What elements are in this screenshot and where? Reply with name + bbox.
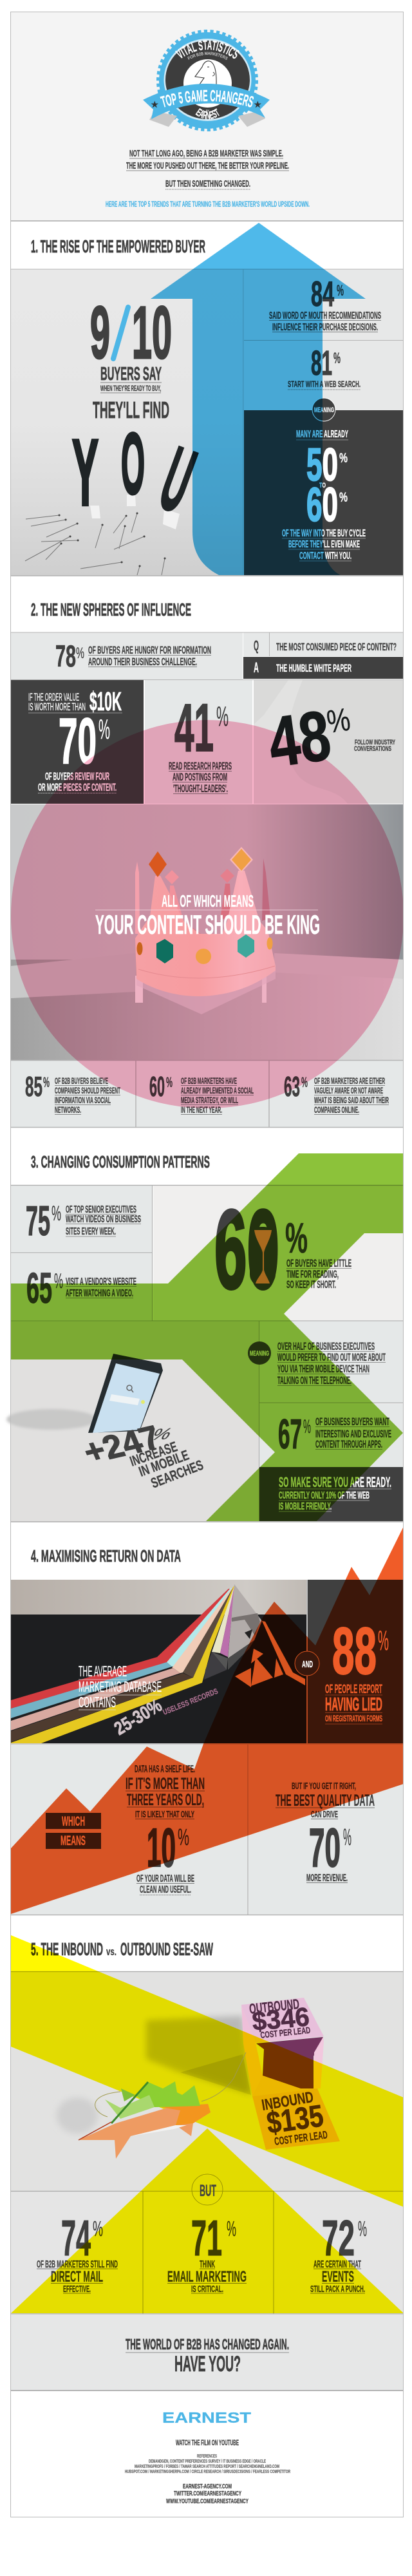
text: business executives	[277, 1341, 386, 1387]
illustration: colour stripes and pyramid	[11, 1584, 262, 1743]
heading: your content should be king	[95, 891, 320, 940]
stat: 84%	[269, 274, 381, 333]
panel: section 1	[11, 269, 404, 575]
stat: 9/10 buyers	[90, 292, 172, 423]
stat: 88%: 88	[332, 1614, 377, 1688]
icon: badge: TOP 5 GAME CHANGERS	[160, 90, 254, 107]
stat: 70%: IF THE ORDER VALUE	[28, 692, 79, 703]
illustration: origami dinosaur	[79, 2052, 246, 2159]
text: average marketing database: THE AVERAGE	[79, 1663, 127, 1680]
callout: answer	[254, 659, 351, 676]
stat: 9/10 buyers: WHEN THEY'RE READY TO BUY,	[100, 385, 161, 393]
stat: 70% more revenue: 70	[309, 1817, 341, 1878]
stat: 63%: COMPANIES ONLINE.	[314, 1104, 359, 1115]
panel: section 4 photo: %	[378, 1625, 389, 1656]
stat: 78%	[55, 639, 211, 673]
stat: +247% mobile searches: +247	[78, 1419, 167, 1471]
stat: 74% direct mail: DIRECT MAIL	[51, 2268, 103, 2286]
stat: 41%: %	[216, 701, 229, 732]
text: references	[125, 2454, 290, 2474]
callout: which means: MEANS	[61, 1833, 86, 1848]
stat: 50 to 60%: MANY ARE ALREADY	[296, 429, 348, 440]
icon: badge: ★	[254, 99, 262, 109]
stat: 75%: %	[52, 1202, 61, 1225]
overlay: yellow see-saw	[11, 1935, 404, 2313]
stat: 78%: %	[76, 645, 84, 662]
stat: +247% mobile searches: %	[148, 1425, 176, 1444]
text: intro copy	[126, 149, 289, 189]
illustration: inbound and outbound box: $135	[265, 2099, 326, 2141]
panel: section 2 bottom statistics	[11, 1060, 404, 1127]
illustration: inbound and outbound box	[241, 1996, 340, 2150]
stat: 63%	[284, 1071, 389, 1115]
stat: 9/10 buyers: BUYERS SAY	[100, 364, 162, 384]
stat: 41%: AND POSTINGS FROM	[173, 772, 227, 783]
text: links	[166, 2483, 248, 2505]
illustration: YOU letters and pins	[25, 416, 207, 575]
stat: 71% email marketing	[167, 2210, 247, 2295]
overlay: green chevrons	[11, 1153, 404, 1521]
stat: 60% with hourglass: SO KEEP IT SHORT.	[286, 1279, 336, 1291]
stat: 84%: %	[337, 282, 344, 299]
callout: answer: A	[254, 659, 259, 676]
stat: 50 to 60%: %	[339, 490, 348, 505]
stat: 60%: 60	[149, 1071, 165, 1103]
panel: section 3 statistics	[6, 1185, 404, 1521]
stat: 10%	[126, 1764, 205, 1895]
illustration: orange pyramid facets	[235, 1621, 305, 1687]
badge: but	[192, 2174, 223, 2205]
stat: 81%	[288, 344, 360, 390]
stat: 41%: 'THOUGHT-LEADERS'.	[173, 783, 228, 795]
stat: 10%: CLEAN AND USEFUL.	[140, 1884, 191, 1895]
stat: 75%	[26, 1197, 141, 1244]
overlay: orange zigzag	[11, 1526, 404, 1914]
illustration: inbound and outbound box: COST PER LEAD	[260, 2025, 311, 2040]
panel: section 4 lower statistics	[11, 1744, 404, 1915]
stat: 67%: 67	[278, 1410, 302, 1457]
panel: section 2 bottom statistics: COMPANIES SHOULD PRESENT	[55, 1085, 120, 1095]
stat: 70%: %	[98, 714, 110, 745]
stat: 60%: MEDIA STRATEGY, OR WILL	[181, 1095, 238, 1105]
stat: 70% more revenue: BUT IF YOU GET IT RIGHT,	[292, 1781, 356, 1792]
stat: 85%: 85	[25, 1071, 42, 1103]
stat: 85%: OF B2B BUYERS BELIEVE	[55, 1075, 108, 1086]
stat: 60% with hourglass: 60	[214, 1186, 279, 1312]
stat: 67%	[278, 1410, 391, 1457]
logo: Earnest: EARNEST	[162, 2409, 251, 2426]
icon: hourglass	[254, 1230, 272, 1283]
panel: section 4 lower statistics: THREE YEARS OLD,	[127, 1791, 204, 1809]
text: references: HUBSPOT.COM / MARKETINGSHERPA.COM / CIRCLE RESEARCH / SIRIUSDECISIONS / FEARLESS COMPETITOR	[125, 2470, 290, 2474]
heading: section 5: vs.	[106, 1946, 117, 1958]
stat: 10%: DATA HAS A SHELF LIFE.	[135, 1764, 195, 1775]
stat: 41%: 41	[174, 690, 214, 766]
icon: badge	[143, 30, 270, 131]
icon: badge: ★	[151, 99, 159, 109]
stat: 63%: 63	[284, 1071, 300, 1103]
text: average marketing database: CONTAINS	[79, 1694, 116, 1710]
text: references: REFERENCES	[197, 2454, 217, 2459]
text: OUTBOUND SEE-SAW	[120, 1939, 213, 1959]
illustration: paper crown	[135, 847, 276, 1014]
panel: section 5 photo	[11, 1972, 404, 2191]
icon: badge: BY	[206, 109, 210, 112]
stat: 50 to 60%: TO	[319, 482, 326, 489]
panel: section 5 statistics	[11, 1972, 404, 2314]
stat: 60%: OF B2B MARKETERS HAVE	[181, 1075, 237, 1086]
stat: 63%: %	[301, 1074, 308, 1090]
stat: 75%: WATCH VIDEOS ON BUSINESS	[66, 1214, 141, 1225]
stat: 10%: OF YOUR DATA WILL BE	[136, 1873, 194, 1884]
stat: 71% email marketing: %	[227, 2217, 236, 2240]
stat: 65%	[26, 1264, 136, 1312]
heading: section 3: 3. CHANGING CONSUMPTION PATTERNS	[31, 1152, 210, 1171]
stat: 50 to 60%	[282, 429, 366, 562]
stat: 72% events: ARE CERTAIN THAT	[314, 2259, 361, 2270]
stat: 60%: IN THE NEXT YEAR.	[181, 1104, 222, 1115]
stat: 48%: 48	[264, 696, 335, 782]
illustration: YOU letters and pins: U	[149, 428, 207, 531]
badge: and: AND	[302, 1659, 313, 1670]
panel: section 1: 10	[132, 292, 172, 374]
stat: 71% email marketing: 71	[191, 2210, 222, 2266]
stat: +247% mobile searches: SEARCHES	[149, 1457, 205, 1492]
stat: 72% events: EVENTS	[322, 2268, 354, 2286]
badge: but: BUT	[200, 2182, 216, 2200]
stat: 10%: %	[178, 1824, 189, 1850]
stat: 72% events: STILL PACK A PUNCH.	[310, 2284, 365, 2295]
callout: question: Q	[254, 638, 259, 654]
stat: 78%: AROUND THEIR BUSINESS CHALLENGE.	[88, 656, 197, 668]
stat: 60% with hourglass: %	[285, 1214, 308, 1262]
stat: 25-30% useless records	[111, 1687, 219, 1739]
text: intro copy: NOT THAT LONG AGO, BEING A B2B MARKETER WAS SIMPLE.	[129, 149, 283, 159]
badge: meaning	[312, 398, 335, 421]
callout: so make sure you are ready: IS MOBILE FRIENDLY.	[279, 1501, 332, 1512]
text: references: MARKETINGPROFS / FORBES / TAMAR SEARCH ATTITUDES REPORT / SEARCHENGINELAND.COM	[135, 2465, 279, 2469]
text: intro copy: BUT THEN SOMETHING CHANGED.	[165, 179, 250, 189]
stat: +247% mobile searches: INCREASE	[127, 1438, 179, 1470]
stat: +247% mobile searches	[78, 1419, 205, 1492]
stat: 74% direct mail: OF B2B MARKETERS STILL FIND	[37, 2259, 118, 2270]
stat: +247% mobile searches: IN MOBILE	[136, 1447, 191, 1480]
stat: 60%	[149, 1071, 254, 1115]
text: links: TWITTER.COM/EARNESTAGENCY	[174, 2490, 241, 2497]
illustration: inbound and outbound box: INBOUND	[261, 2088, 315, 2114]
badge: meaning	[248, 1341, 271, 1365]
illustration: phone in paper	[6, 1354, 163, 1433]
stat: 70%: 70	[59, 705, 97, 777]
panel: section 4 photo: MARKETING DATABASE	[79, 1678, 162, 1695]
stat: 74% direct mail: EFFECTIVE.	[63, 2284, 91, 2295]
panel: closing statement	[11, 2315, 404, 2391]
stat: 74% direct mail: %	[93, 2217, 103, 2240]
stat: 50 to 60%: 60	[306, 478, 338, 531]
stat: 70%	[28, 687, 122, 793]
stat: 75%: SITES EVERY WEEK.	[66, 1226, 116, 1237]
stat: 70%: IS WORTH MORE THAN	[28, 701, 86, 713]
stat: 65%: 65	[26, 1264, 52, 1312]
stat: 50 to 60%: %	[339, 451, 348, 466]
callout: so make sure you are ready	[279, 1474, 391, 1512]
stat: 65%: %	[54, 1269, 63, 1293]
heading: your content should be king: ALL OF WHICH MEANS	[162, 891, 254, 911]
panel: crown photo background	[11, 804, 404, 1061]
stat: 78%: OF BUYERS ARE HUNGRY FOR INFORMATION	[88, 645, 211, 656]
stat: 71% email marketing: EMAIL MARKETING	[167, 2268, 247, 2286]
illustration: inbound and outbound box: $346	[251, 2002, 310, 2036]
stat: 70%: $10K	[89, 687, 122, 716]
panel: section 2 statistics	[11, 632, 404, 804]
stat: 71% email marketing: THINK	[200, 2259, 215, 2270]
stat: 85%: NETWORKS.	[55, 1104, 81, 1115]
text: 1. THE RISE OF THE EMPOWERED BUYER	[31, 236, 205, 256]
text: 2. THE NEW SPHERES OF INFLUENCE	[31, 600, 191, 620]
stat: 74% direct mail: 74	[61, 2210, 91, 2266]
illustration: YOU letters and pins: Y	[72, 420, 98, 525]
stat: 60% with hourglass: TIME FOR READING,	[286, 1269, 339, 1280]
stat: 78%: 78	[55, 639, 76, 673]
stat: 70%: OF BUYERS REVIEW FOUR	[45, 771, 109, 782]
stat: 50 to 60%: 50	[306, 440, 338, 491]
icon: badge: EARNEST	[196, 108, 220, 120]
stat: 70% more revenue: %	[343, 1824, 351, 1850]
stat: 60%: %	[166, 1074, 173, 1090]
stat: 48%: %	[324, 701, 353, 740]
panel: section 2 bottom statistics: ALREADY IMPLEMENTED A SOCIAL	[181, 1085, 254, 1095]
stat: 74% direct mail	[37, 2210, 118, 2295]
panel: section 5 statistics: %	[358, 2217, 367, 2240]
stat: 70% more revenue: CAN DRIVE	[311, 1810, 338, 1820]
stat: 10%: IT IS LIKELY THAT ONLY	[135, 1810, 194, 1820]
stat: 67%: %	[303, 1416, 311, 1437]
stat: 84%: 84	[311, 274, 334, 314]
stat: 25-30% useless records: 25-30%	[111, 1695, 165, 1739]
panel: closing statement: HAVE YOU?	[174, 2352, 241, 2376]
stat: 65%: VISIT A VENDOR'S WEBSITE	[66, 1276, 136, 1287]
icon: badge: FOR B2B MARKETERS	[187, 52, 228, 60]
stat: 70% more revenue: MORE REVENUE.	[306, 1873, 348, 1884]
stat: 72% events	[310, 2210, 367, 2295]
badge: meaning: MEANING	[250, 1350, 269, 1358]
text: links: EARNEST-AGENCY.COM	[183, 2483, 232, 2490]
icon: badge: VITAL STATISTICS	[175, 40, 239, 59]
stat: 10%: IF IT'S MORE THAN	[126, 1775, 205, 1793]
heading: section 4: 4. MAXIMISING RETURN ON DATA	[31, 1546, 181, 1566]
panel: section 4 photo	[11, 1580, 404, 1743]
stat: 9/10 buyers: 9	[90, 292, 110, 374]
badge: and	[295, 1651, 319, 1676]
stat: 75%: 75	[26, 1197, 50, 1244]
panel: footer	[125, 2409, 290, 2505]
stat: 81%: %	[333, 350, 341, 367]
stat: 48%	[264, 696, 395, 782]
stat: 41%	[169, 690, 232, 795]
text: average marketing database	[79, 1663, 162, 1710]
stat: 65%: AFTER WATCHING A VIDEO.	[66, 1288, 133, 1299]
stat: 72% events: 72	[322, 2210, 355, 2266]
text: links: WWW.YOUTUBE.COM/EARNESTAGENCY	[166, 2497, 248, 2505]
heading: section 5: 5. THE INBOUND	[31, 1939, 103, 1959]
stat: 70%: OR MORE PIECES OF CONTENT.	[38, 782, 117, 793]
stat: 88%	[325, 1614, 389, 1724]
stat: 50 to 60%: CONTACT WITH YOU.	[299, 551, 351, 562]
callout: question	[254, 638, 397, 654]
stat: 75%: OF TOP SENIOR EXECUTIVES	[66, 1204, 136, 1215]
arrow: blue upward arrow overlay	[151, 223, 366, 575]
stat: 70% more revenue	[276, 1781, 375, 1884]
panel: intro	[11, 12, 403, 220]
panel: section 2 statistics: READ RESEARCH PAPERS	[169, 761, 232, 772]
stat: 85%: INFORMATION VIA SOCIAL	[55, 1095, 111, 1105]
illustration: inbound and outbound box: COST PER LEAD	[274, 2128, 328, 2148]
text: watch the film: WATCH THE FILM ON YOUTUBE	[176, 2439, 239, 2447]
callout: which means: WHICH	[62, 1814, 85, 1829]
stat: 9/10 buyers: THEY'LL FIND	[93, 397, 169, 423]
callout: which means	[46, 1813, 101, 1849]
illustration: inbound and outbound box: OUTBOUND	[248, 1996, 300, 2017]
illustration: YOU letters and pins: O	[121, 416, 145, 512]
stat: 25-30% useless records: USELESS RECORDS	[162, 1687, 219, 1717]
stat: 85%	[25, 1071, 120, 1115]
overlay: pink circle	[11, 720, 404, 1108]
stat: 10%: 10	[147, 1817, 176, 1878]
text: references: DEMANDGEN, CONTENT PREFERENCES SURVEY / IT BUSINESS EDGE / ORACLE	[149, 2459, 266, 2464]
badge: meaning: MEANING	[314, 406, 334, 414]
stat: 85%: %	[43, 1074, 50, 1090]
stat: 71% email marketing: IS CRITICAL.	[191, 2284, 223, 2295]
stat: 81%: 81	[311, 344, 332, 383]
